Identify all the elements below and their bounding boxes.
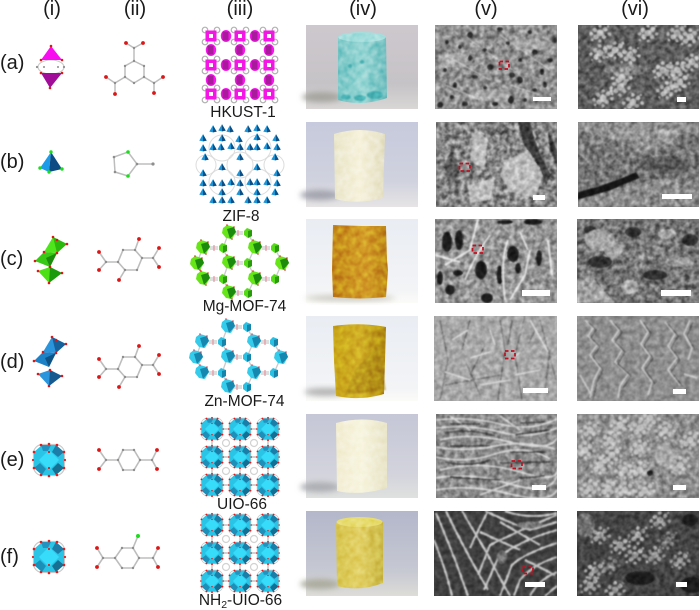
SEM image: UIO-66 crystals (577, 414, 699, 498)
icon: NH2-UIO-66 zirconium cluster (32, 540, 66, 574)
row labels: (c) (0, 248, 23, 270)
column i: metal node polyhedra (32, 45, 68, 574)
column iv: foam photographs (300, 25, 418, 596)
row labels: (f) (0, 546, 19, 568)
structure: ZIF-8 (196, 124, 284, 203)
structure: UIO-66 (200, 417, 280, 497)
icon: DOBDC linker, Zn (97, 344, 161, 389)
photo: NH2-UIO-66 foam (300, 511, 418, 596)
photo: ZIF-8 foam (300, 122, 418, 207)
caption: UIO-66: UIO-66 (217, 496, 267, 513)
SEM image: Zn-MOF-74 foam (434, 316, 557, 401)
icon: ZIF-8 zinc tetrahedron (38, 150, 64, 174)
photo: UIO-66 foam (300, 414, 418, 498)
structure: HKUST-1 (202, 27, 278, 103)
scale bars, column vi (661, 97, 692, 587)
column headers (43, 0, 649, 20)
SEM image: Mg-MOF-74 foam (435, 219, 557, 303)
icon: DOBDC linker, Mg (97, 237, 161, 282)
structure: NH2-UIO-66 (200, 513, 280, 593)
caption: NH2-UIO-66: -UIO-66 (227, 592, 282, 609)
column ii: organic linkers (95, 41, 165, 569)
SEM image: Zn-MOF-74 surface (577, 316, 699, 401)
SEM image: HKUST-1 foam (435, 25, 557, 109)
SEM image: UIO-66 foam (436, 414, 557, 498)
red selection box: a (500, 62, 509, 69)
scale bars, column v (522, 97, 551, 587)
SEM image: NH2-UIO-66 foam (434, 511, 557, 596)
photo: HKUST-1 foam (302, 25, 418, 109)
icon: Zn-MOF-74 zinc chain (33, 336, 67, 387)
row labels: (a) (0, 52, 24, 74)
SEM image: ZIF-8 crystals (578, 122, 699, 207)
red selection box: c (472, 246, 483, 253)
caption: Zn-MOF-74: Zn-MOF-74 (204, 393, 285, 410)
structure: Mg-MOF-74 (190, 224, 289, 300)
red selection box: e (512, 461, 522, 468)
icon: BDC linker (97, 448, 159, 471)
SEM image: NH2-UIO-66 crystals (575, 511, 700, 600)
photo: Zn-MOF-74 foam (304, 316, 418, 401)
red selection box: b (460, 164, 470, 171)
SEM image: HKUST-1 crystals (578, 24, 700, 112)
row labels (0, 52, 24, 568)
icon: Mg-MOF-74 magnesium chain (34, 236, 68, 284)
icon: methylimidazole linker (113, 150, 155, 178)
photo: Mg-MOF-74 foam (305, 219, 418, 303)
caption: ZIF-8: ZIF-8 (222, 208, 260, 225)
column vi: high magnification SEM images (574, 24, 700, 600)
row labels: (d) (0, 351, 24, 373)
column v: low magnification SEM images (434, 25, 557, 596)
icon: UIO-66 zirconium cluster (32, 443, 66, 477)
SEM image: ZIF-8 foam (436, 122, 557, 207)
caption: NH2-UIO-66: NH (199, 592, 221, 609)
row labels: (e) (0, 449, 24, 471)
column iii: framework structures (189, 27, 289, 610)
row labels: (b) (0, 151, 24, 173)
icon: BTC linker (104, 41, 165, 96)
caption: HKUST-1: HKUST-1 (210, 104, 276, 121)
red selection box: f (522, 566, 533, 574)
structure: Zn-MOF-74 (189, 318, 288, 393)
caption: Mg-MOF-74: Mg-MOF-74 (203, 298, 287, 315)
SEM image: Mg-MOF-74 crystals (577, 219, 699, 303)
icon: HKUST-1 copper paddlewheel (36, 45, 65, 89)
red selection box: d (505, 351, 515, 358)
icon: amino BDC linker (95, 534, 160, 569)
